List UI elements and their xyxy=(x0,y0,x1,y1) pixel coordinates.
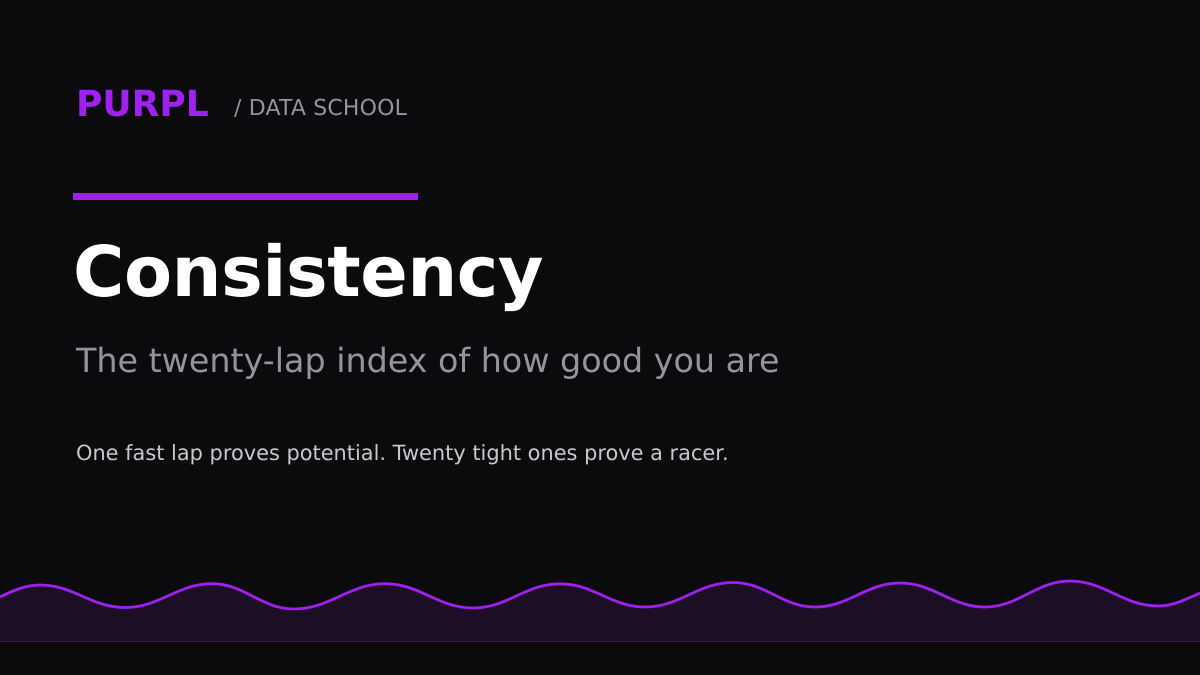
wave area fill xyxy=(0,581,1200,641)
wave line xyxy=(0,581,1200,609)
baseline xyxy=(0,641,1200,642)
brand label: data school: / DATA SCHOOL xyxy=(234,96,407,121)
brand logo: PURPL: PURPL xyxy=(76,84,209,125)
lap time wave chart xyxy=(0,580,1200,642)
subtitle: The twenty-lap index of how good you are xyxy=(76,341,779,380)
title: Consistency xyxy=(73,231,543,313)
accent rule xyxy=(73,193,418,200)
tagline: One fast lap proves potential. Twenty tight ones prove a racer. xyxy=(76,441,729,465)
